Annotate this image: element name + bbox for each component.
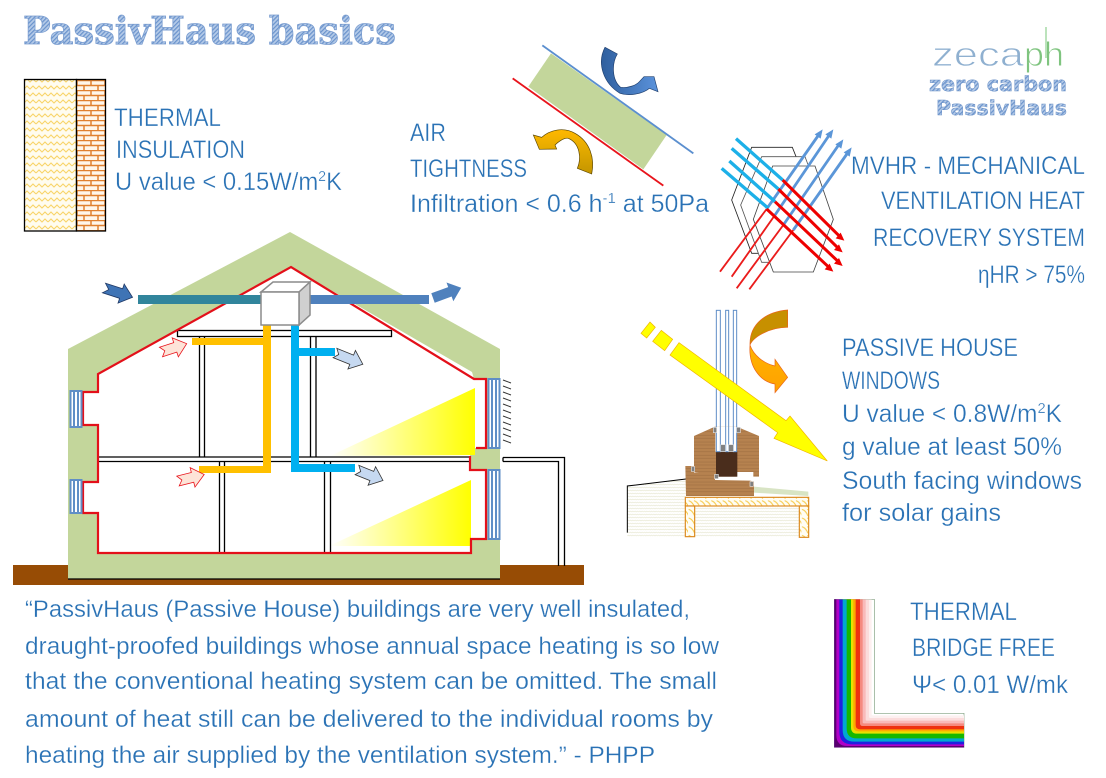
text: thermal bridge free: Ψ< 0.01 W/mk: [912, 671, 1068, 699]
text: PHPP quote: heating the air supplied by the ventilation system.” - PHPP: [25, 742, 655, 769]
text: MVHR: ηHR > 75%: [978, 261, 1085, 289]
text: thermal insulation: [114, 104, 342, 196]
text: passive house windows: K: [1046, 400, 1062, 428]
icon: window sill detail: [627, 310, 827, 537]
porch: [503, 458, 564, 566]
icon: air tightness layer: [513, 45, 693, 186]
logo: zecaph: zero carbon: [929, 72, 1067, 96]
title: PassivHaus basics: [23, 8, 396, 53]
text: air tightness: at 50Pa: [616, 190, 709, 218]
text: PHPP quote: “PassivHaus (Passive House) buildings are very well insulated,: [25, 596, 690, 623]
sun ray arrow: [641, 322, 827, 461]
text: passive house windows: U value < 0.8W/m: [842, 400, 1041, 428]
shading louvres: [503, 380, 511, 443]
text: thermal bridge free: THERMAL: [910, 598, 1017, 626]
text: PHPP quote: draught-proofed buildings whose annual space heating is so low: [25, 633, 720, 660]
text: passive house windows: 2: [1037, 400, 1046, 417]
text: passive house windows: for solar gains: [842, 499, 1001, 527]
floor and partition lines: [98, 330, 470, 553]
logo: zecaph: PassivHaus: [936, 96, 1067, 120]
text: air tightness: -1: [603, 190, 616, 207]
logo: zecaph: ph: [1024, 36, 1064, 74]
logo: zecaph: [929, 27, 1067, 120]
ducts: [138, 295, 262, 304]
windows: [70, 379, 500, 539]
text: air tightness: Infiltration < 0.6 h: [410, 190, 602, 218]
text: passive house windows: WINDOWS: [842, 367, 940, 395]
sunlight patches: [330, 388, 475, 456]
text: passive house windows: g value at least 50%: [842, 433, 1062, 461]
icon: insulated wall section: [24, 80, 106, 231]
text: air tightness: TIGHTNESS: [410, 155, 527, 183]
ground: [13, 565, 584, 585]
text: thermal bridge free: [910, 598, 1068, 699]
airtight line: [83, 267, 486, 553]
text: PHPP quote: amount of heat still can be delivered to the individual rooms by: [25, 706, 713, 733]
text: MVHR: MVHR - MECHANICAL: [851, 152, 1085, 180]
text: passive house windows: [842, 334, 1082, 527]
chart: house cross-section: [13, 232, 584, 585]
interior: [98, 267, 474, 553]
text: thermal insulation: U value < 0.15W/m: [115, 168, 328, 196]
text: air tightness: AIR: [410, 119, 446, 147]
chart: thermal bridge isotherms: [834, 599, 964, 747]
text: passive house windows: PASSIVE HOUSE: [842, 334, 1018, 362]
airflow arrows: [101, 278, 465, 491]
MVHR unit: [261, 282, 310, 325]
text: MVHR: [851, 152, 1085, 289]
logo: zecaph: zeca: [932, 36, 1024, 74]
text: thermal insulation: THERMAL: [114, 104, 221, 132]
text: PHPP quote: [25, 596, 720, 769]
text: PHPP quote: that the conventional heating system can be omitted. The small: [25, 668, 717, 695]
text: thermal insulation: INSULATION: [116, 136, 245, 164]
building envelope: [68, 232, 500, 579]
icon: heat exchanger: [720, 129, 852, 289]
text: thermal insulation: 2: [318, 168, 326, 185]
text: thermal insulation: K: [326, 168, 342, 196]
solar curved arrow: [750, 310, 788, 393]
text: passive house windows: South facing windows: [842, 467, 1082, 495]
text: thermal bridge free: BRIDGE FREE: [912, 634, 1055, 662]
text: air tightness: [410, 119, 709, 218]
